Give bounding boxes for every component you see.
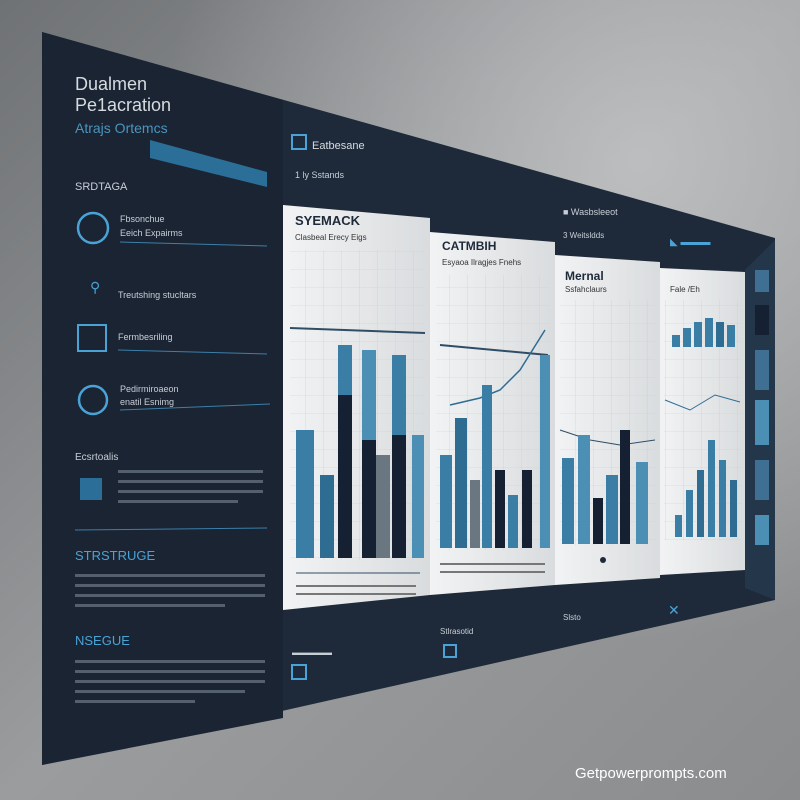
chart sheet 1: Clasbeal Erecy Eigs (295, 233, 367, 242)
panel: left list: Fbsonchue (120, 214, 165, 224)
chart sheet 1: SYEMACK (295, 213, 361, 228)
bottom icons: ✕ (668, 602, 680, 618)
panel: left list: Ecsrtoalis (75, 452, 118, 463)
panel: column headers: ◣ ▬▬▬ (670, 237, 710, 248)
panel: left list (75, 181, 270, 703)
panel: left list: SRDTAGA (75, 181, 128, 193)
title (75, 74, 267, 187)
bottom icons: Slsto (563, 613, 581, 622)
panel: left list: Pedirmiroaeon (120, 384, 179, 394)
chart sheet 1 (283, 205, 430, 610)
chart sheet 2: Esyaoa Ilragjes Fnehs (442, 258, 521, 267)
title: Atrajs Ortemcs (75, 120, 168, 136)
panel: left list: STRSTRUGE (75, 548, 156, 563)
panel: column headers: 1 ly Sstands (295, 170, 345, 180)
bottom icons: Stlrasotid (440, 627, 473, 636)
bottom icons: ▬▬▬▬▬ (292, 648, 332, 657)
panel: column headers: 3 Weitsldds (563, 231, 604, 240)
chart sheet 3: Ssfahclaurs (565, 285, 607, 294)
panel: left list: Fermbesriling (118, 332, 173, 342)
watermark: Getpowerprompts.com (575, 765, 727, 782)
panel: left list: Treutshing stucltars (118, 290, 197, 300)
title: Pe1acration (75, 95, 171, 115)
panel: left list: NSEGUE (75, 633, 130, 648)
chart sheet 4: Fale /Eh (670, 285, 700, 294)
panel: left list: ⚲ (90, 279, 100, 295)
panel: left list: enatil Esnimg (120, 397, 174, 407)
panel: left list: Eeich Expairms (120, 228, 183, 238)
panel: column headers: ■ Wasbsleeot (563, 207, 618, 217)
chart sheet 3: Mernal (565, 269, 604, 283)
chart sheet 4 (660, 268, 745, 575)
title: Dualmen (75, 74, 147, 94)
chart sheet 2: CATMBIH (442, 239, 496, 253)
chart sheet 2 (430, 232, 555, 595)
chart sheet 3 (555, 255, 660, 585)
panel: column headers: Eatbesane (312, 140, 365, 152)
bottom icons (292, 602, 680, 679)
panel: column headers (292, 135, 710, 248)
